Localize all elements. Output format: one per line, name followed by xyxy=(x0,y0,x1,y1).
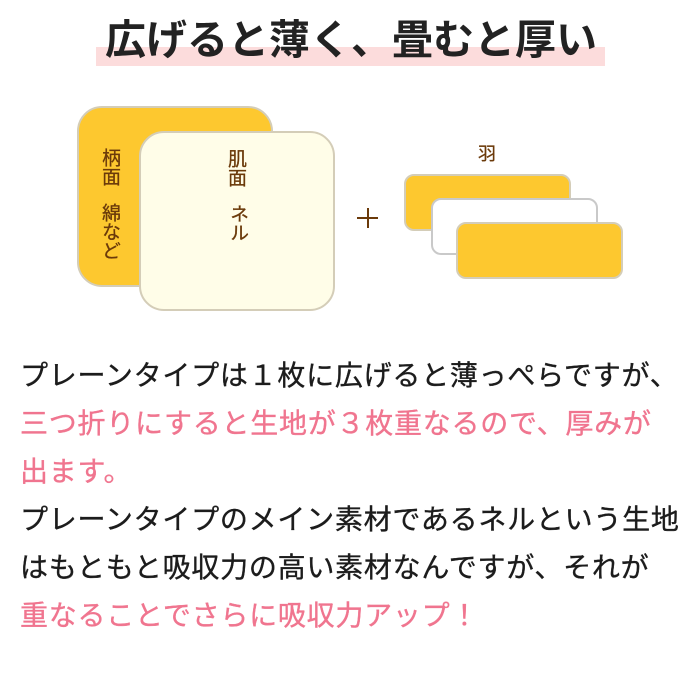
layer: bottom yellow xyxy=(456,222,623,279)
body line 5: はもともと吸収力の高い素材なんですが、それが xyxy=(20,552,649,583)
label: skin side: 肌面 xyxy=(225,149,246,187)
card: pattern side xyxy=(77,106,273,287)
body line 2 highlighted: 三つ折りにすると生地が３枚重なるので、厚みが xyxy=(20,408,652,439)
label: pattern side: 柄面 xyxy=(99,148,120,186)
label: cotton etc: 綿など xyxy=(99,203,120,260)
diagram: feather layers xyxy=(404,174,623,279)
title highlight band xyxy=(96,47,605,66)
body line 6 highlighted: 重なることでさらに吸収力アップ！ xyxy=(20,600,479,631)
label: flannel: ネル xyxy=(227,204,248,242)
layer: top yellow xyxy=(404,174,571,231)
body line 1: プレーンタイプは１枚に広げると薄っぺらですが、 xyxy=(20,360,678,391)
label: feather: 羽 xyxy=(478,144,496,164)
layer: middle white xyxy=(431,198,598,255)
title text: 広げると薄く、畳むと厚い xyxy=(105,17,597,63)
plus sign xyxy=(357,208,378,228)
body line 3 highlighted: 出ます。 xyxy=(20,456,132,487)
card: skin side xyxy=(139,131,335,311)
body line 4: プレーンタイプのメイン素材であるネルという生地 xyxy=(20,504,680,535)
title xyxy=(96,17,605,66)
body text xyxy=(20,360,680,631)
diagram: two-layer fabric xyxy=(77,106,335,311)
